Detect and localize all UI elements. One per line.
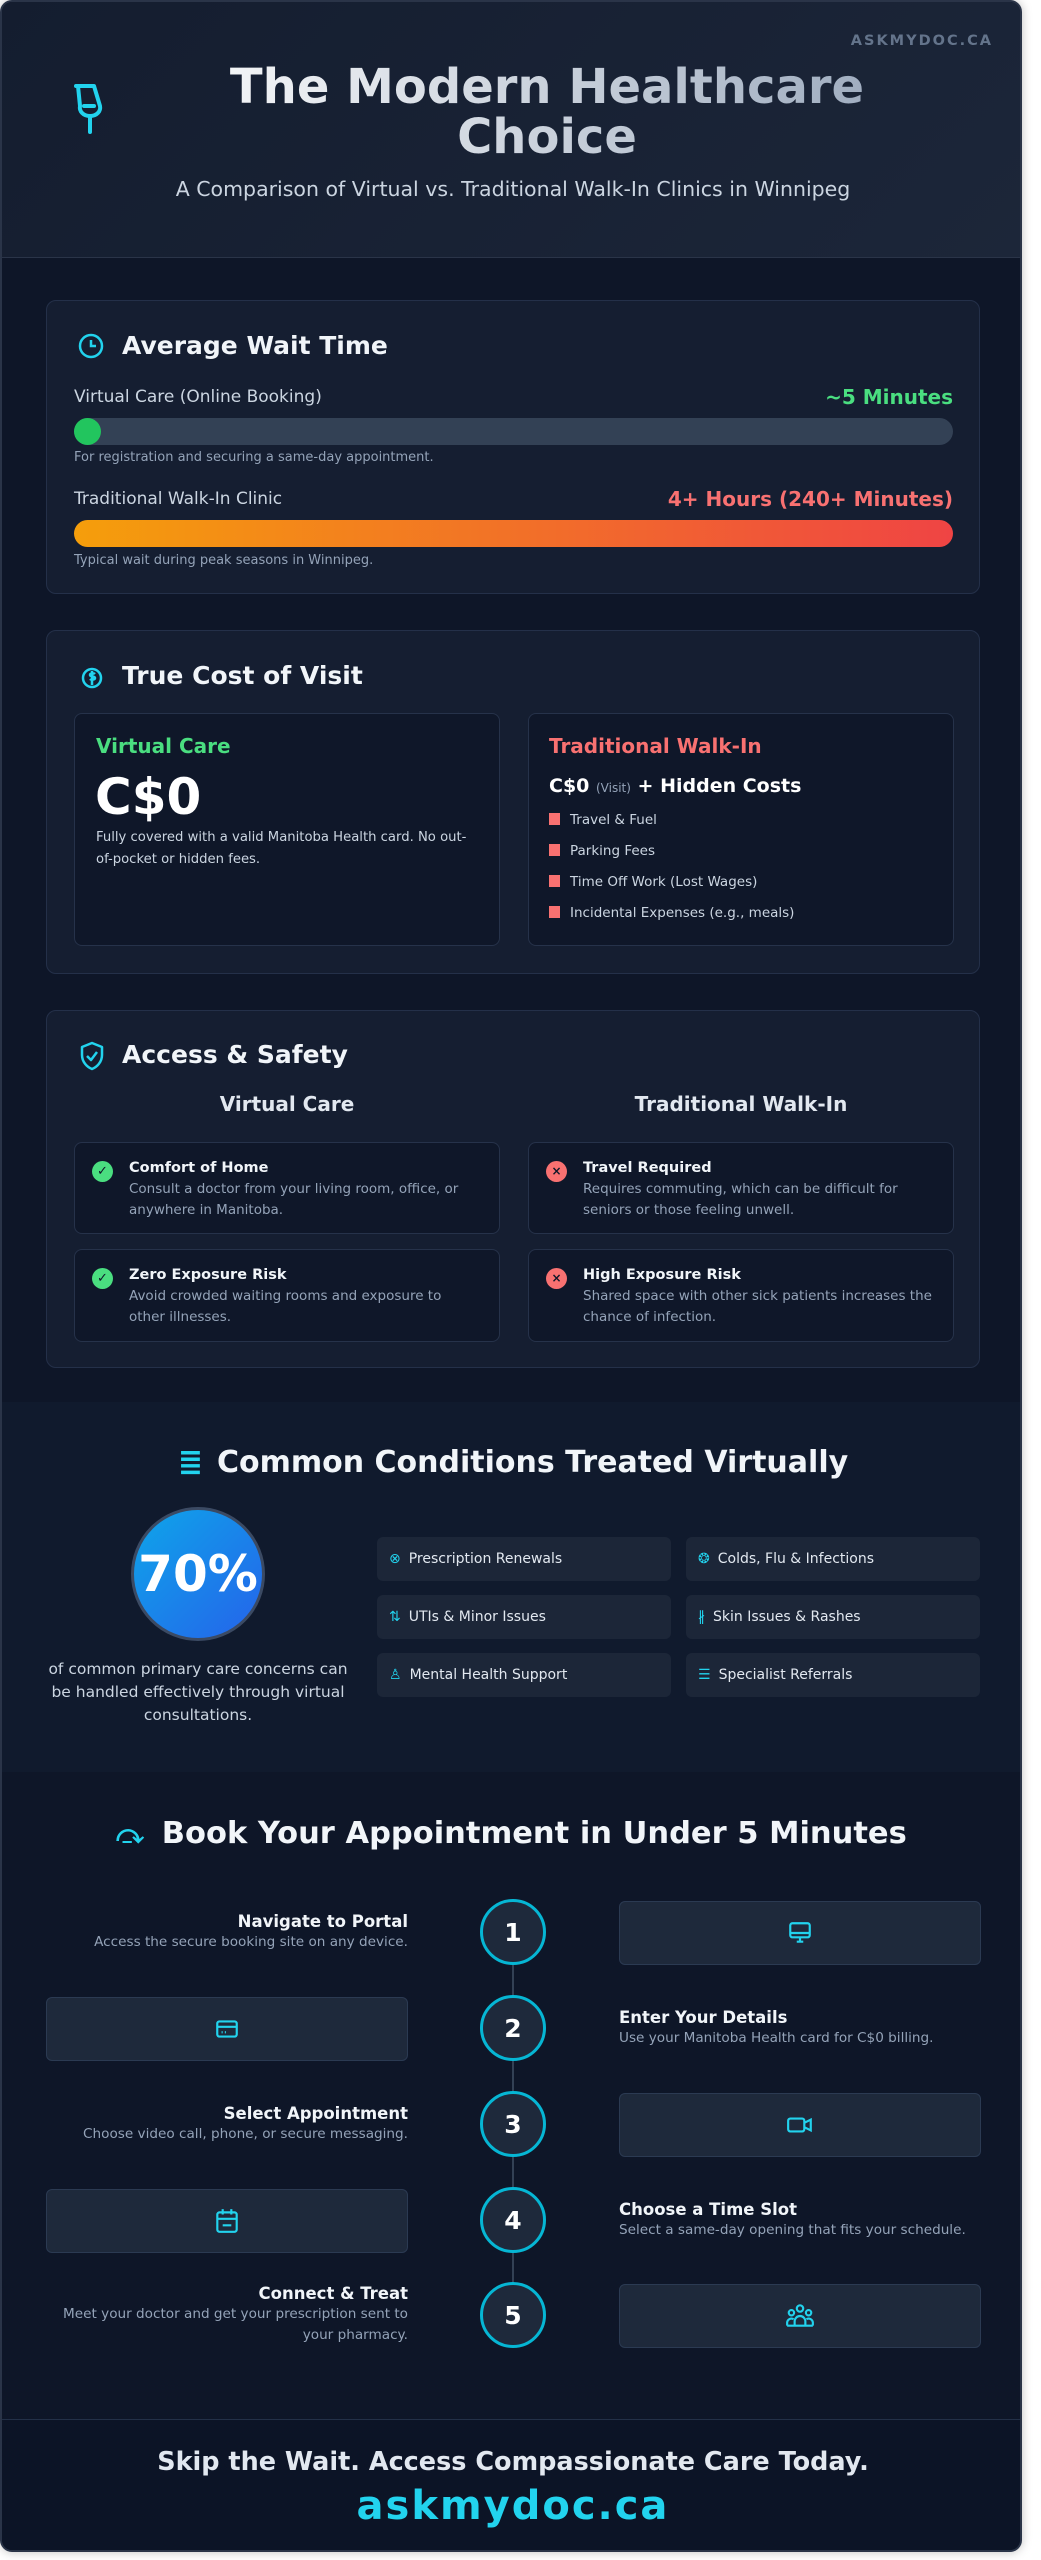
- heading: Access & Safety: [122, 1040, 348, 1069]
- card: virtual cost: Fully covered with a valid Manitoba Health card. No out-of-pocket or hidden fees.: [96, 830, 466, 867]
- stat circle: [131, 1507, 265, 1641]
- step 5: your pharmacy.: [303, 2327, 408, 2343]
- column header traditional: Traditional Walk-In: [635, 1092, 847, 1116]
- step 4: Choose a Time Slot: [619, 2200, 797, 2219]
- section: common conditions: [2, 1402, 1024, 1772]
- title: [132, 62, 962, 162]
- conditions grid: ∦ Skin Issues & Rashes: [698, 1609, 861, 1625]
- step 4: 4: [504, 2206, 522, 2234]
- item: high exposure: Shared space with other sick patients increases the chance of infection.: [583, 1288, 932, 1325]
- footer: [2, 2419, 1024, 2554]
- step 1: 1: [504, 1918, 522, 1946]
- panel: average wait time: [46, 300, 980, 594]
- conditions grid: [377, 1537, 980, 1697]
- item: comfort of home: ✓: [97, 1164, 108, 1179]
- caption: Typical wait during peak seasons in Winnipeg.: [74, 553, 373, 568]
- panel: access & safety: [46, 1010, 980, 1368]
- step 3: Select Appointment: [224, 2104, 408, 2123]
- title: Choice: [457, 109, 637, 165]
- step 1: Navigate to Portal: [238, 1912, 408, 1931]
- item: zero exposure: [74, 1249, 500, 1342]
- card: traditional cost: [528, 713, 954, 946]
- step 3: [83, 2091, 981, 2157]
- item: zero exposure: Avoid crowded waiting rooms and exposure to other illnesses.: [129, 1288, 441, 1325]
- icon: stethoscope: [74, 84, 102, 134]
- step 5: 5: [504, 2300, 522, 2330]
- icon: shield: [80, 1042, 104, 1070]
- list: hidden costs: Travel & Fuel: [570, 812, 657, 828]
- bar: virtual: [74, 418, 953, 445]
- step 2: 2: [504, 2014, 522, 2042]
- item: high exposure: [528, 1249, 954, 1342]
- list: hidden costs: Time Off Work (Lost Wages): [570, 874, 757, 890]
- list: hidden costs: [549, 812, 794, 921]
- virtual value: ~5 Minutes: [825, 385, 953, 409]
- brand tag: ASKMYDOC.CA: [851, 33, 993, 49]
- timeline: steps: [46, 1899, 981, 2348]
- list: hidden costs: Parking Fees: [570, 843, 655, 859]
- item: travel required: Requires commuting, which can be difficult for seniors or those feeling unwell.: [583, 1181, 898, 1218]
- conditions grid: ⊗ Prescription Renewals: [389, 1551, 562, 1567]
- footer url: askmydoc.ca: [357, 2483, 669, 2529]
- item: high exposure: ×: [551, 1271, 562, 1285]
- icon: clock: [78, 334, 104, 358]
- step 4: [46, 2187, 966, 2253]
- bar: traditional: [74, 520, 953, 547]
- header: [2, 2, 1024, 258]
- caption: For registration and securing a same-day appointment.: [74, 450, 434, 465]
- conditions grid: ❂ Colds, Flu & Infections: [698, 1551, 874, 1567]
- item: comfort of home: [74, 1142, 500, 1234]
- traditional value: 4+ Hours (240+ Minutes): [668, 487, 953, 511]
- step 3: 3: [504, 2110, 522, 2138]
- step 4: Select a same-day opening that fits your schedule.: [619, 2222, 966, 2238]
- stat circle: 70%: [138, 1545, 258, 1603]
- step 5: Connect & Treat: [259, 2284, 408, 2303]
- footer tagline: Skip the Wait. Access Compassionate Care Today.: [157, 2447, 869, 2477]
- card: virtual cost: Virtual Care: [96, 734, 231, 758]
- conditions grid: ☰ Specialist Referrals: [698, 1667, 852, 1683]
- step 1: Access the secure booking site on any device.: [94, 1934, 408, 1950]
- heading: True Cost of Visit: [122, 661, 363, 690]
- list: hidden costs: Incidental Expenses (e.g., meals): [570, 905, 794, 921]
- step 2: Use your Manitoba Health card for C$0 billing.: [619, 2030, 933, 2046]
- card: virtual cost: C$0: [95, 768, 201, 826]
- item: travel required: [528, 1142, 954, 1234]
- column header virtual: Virtual Care: [220, 1092, 354, 1116]
- step 2: Enter Your Details: [619, 2008, 787, 2027]
- step 2: [46, 1995, 933, 2061]
- card: virtual cost: [74, 713, 500, 946]
- conditions grid: ⇅ UTIs & Minor Issues: [389, 1609, 546, 1625]
- item: zero exposure: ✓: [97, 1271, 108, 1286]
- traditional label: Traditional Walk-In Clinic: [74, 489, 282, 509]
- panel: true cost: [46, 630, 980, 974]
- step 5: [63, 2282, 981, 2348]
- item: high exposure: High Exposure Risk: [583, 1267, 741, 1283]
- step 3: Choose video call, phone, or secure messaging.: [83, 2126, 408, 2142]
- item: zero exposure: Zero Exposure Risk: [129, 1267, 287, 1283]
- card: traditional cost: Traditional Walk-In: [549, 734, 762, 758]
- item: travel required: ×: [551, 1164, 562, 1178]
- heading: Average Wait Time: [122, 331, 388, 360]
- step 1: [94, 1899, 981, 1965]
- card: traditional cost: C$0 (Visit) + Hidden Costs: [549, 775, 801, 797]
- item: travel required: Travel Required: [583, 1160, 712, 1176]
- step 5: Meet your doctor and get your prescription sent to: [63, 2306, 408, 2322]
- stat caption: of common primary care concerns can be handled effectively through virtual consultations.: [48, 1660, 348, 1724]
- item: comfort of home: Consult a doctor from your living room, office, or anywhere in Manitoba.: [129, 1181, 458, 1218]
- icon: money: [82, 668, 102, 688]
- item: comfort of home: Comfort of Home: [129, 1160, 268, 1176]
- heading: ≣ Common Conditions Treated Virtually: [178, 1445, 848, 1480]
- heading: book appointment: ⤼ Book Your Appointment in Under 5 Minutes: [116, 1816, 907, 1851]
- conditions grid: ♙ Mental Health Support: [389, 1667, 567, 1683]
- title: The Modern Healthcare: [230, 59, 864, 115]
- virtual label: Virtual Care (Online Booking): [74, 387, 322, 407]
- subtitle: A Comparison of Virtual vs. Traditional Walk-In Clinics in Winnipeg: [176, 177, 850, 201]
